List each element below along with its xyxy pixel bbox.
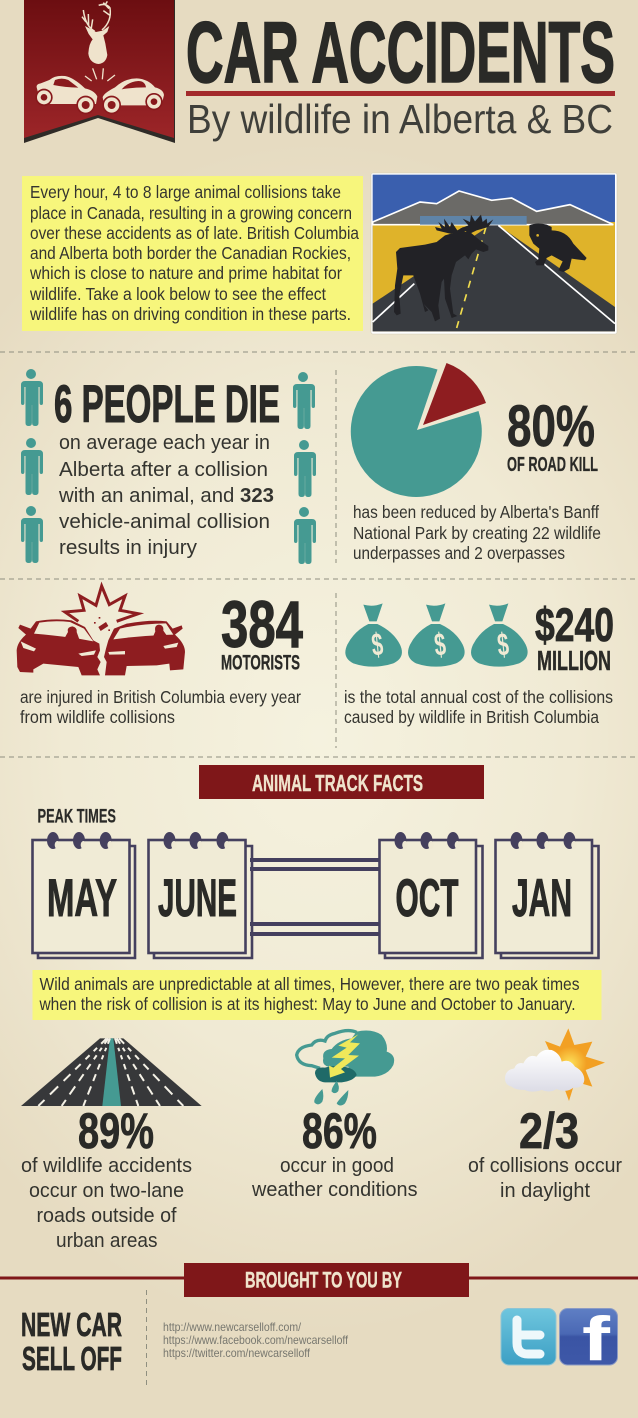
icon: crashed red cars [17, 586, 185, 675]
icon: money bags [345, 603, 528, 667]
icon: left car [35, 76, 97, 114]
icon: twitter [501, 1308, 556, 1365]
intro callout: over these accidents as of late. British Columbia [30, 223, 359, 243]
footer divider [146, 1290, 148, 1385]
intro callout [22, 176, 363, 331]
calendar: oct: OCT [396, 869, 458, 928]
intro callout: Every hour, 4 to 8 large animal collisions take [30, 182, 341, 202]
stat label: MOTORISTS [221, 652, 300, 674]
cost text [344, 687, 613, 727]
brand name [21, 1307, 122, 1378]
peak times callout: Wild animals are unpredictable at all times, However, there are two peak times [40, 974, 580, 994]
stat: 89%: 89% [78, 1103, 154, 1159]
icon: deer head [82, 1, 110, 64]
calendars [32, 832, 598, 958]
panel: motorists [17, 586, 303, 727]
roads text: occur on two-lane [29, 1179, 184, 1202]
intro callout: place in Canada, resulting in a growing concern [30, 203, 352, 223]
calendar: jan [496, 832, 598, 958]
section dividers [0, 352, 638, 757]
brand name: NEW CAR [21, 1307, 122, 1344]
heading: 6 people die: 6 PEOPLE DIE [54, 375, 280, 434]
icon: right car [102, 78, 164, 114]
stat: 80%: 80% [507, 394, 595, 459]
motorists text [20, 687, 301, 727]
panel: daylight [468, 1028, 622, 1202]
panel: good weather [251, 1031, 418, 1201]
roads text: roads outside of [36, 1204, 177, 1227]
motorists text: are injured in British Columbia every year [20, 687, 301, 707]
stat: 384: 384 [221, 587, 303, 661]
peak times callout: when the risk of collision is at its highest: May to June and October to January. [39, 994, 576, 1014]
daylight text [468, 1154, 622, 1202]
brand name: SELL OFF [22, 1341, 122, 1378]
deaths text: with an animal, and 323 [58, 484, 274, 507]
road kill text: National Park by creating 22 wildlife [353, 523, 601, 543]
footer links: https://www.facebook.com/newcarselloff [163, 1333, 349, 1347]
panel: road kill [351, 363, 601, 563]
panel: cost [344, 598, 614, 727]
road scene illustration [371, 173, 617, 334]
heading: animal track facts [199, 765, 484, 799]
icon: storm cloud [297, 1031, 394, 1105]
footer links: http://www.newcarselloff.com/ [163, 1320, 302, 1334]
road kill text: has been reduced by Alberta's Banff [353, 502, 599, 522]
roads text: of wildlife accidents [21, 1154, 192, 1177]
intro callout: wildlife has on driving condition in these parts. [29, 304, 351, 324]
intro callout: and Alberta both border the Canadian Rockies, [30, 243, 351, 263]
calendar: june: JUNE [158, 869, 237, 928]
intro callout: which is close to nature and prime habitat for [29, 263, 342, 283]
people icons [21, 369, 316, 564]
weather text: weather conditions [251, 1178, 418, 1201]
calendar: oct [380, 832, 482, 958]
motorists text: from wildlife collisions [20, 707, 175, 727]
intro callout: wildlife. Take a look below to see the effect [29, 284, 326, 304]
footer links: https://twitter.com/newcarselloff [163, 1346, 311, 1360]
panel: two-lane roads [21, 1038, 202, 1252]
heading: animal track facts: ANIMAL TRACK FACTS [252, 770, 423, 796]
connector bars [250, 860, 381, 934]
icon: facebook [560, 1305, 618, 1374]
deaths text: Alberta after a collision [59, 458, 268, 481]
banner emblem [24, 0, 175, 143]
cost text: is the total annual cost of the collisions [344, 687, 613, 707]
weather text [251, 1154, 418, 1201]
stat: 86%: 86% [302, 1103, 377, 1159]
calendar: june [148, 832, 252, 958]
daylight text: of collisions occur [468, 1154, 622, 1177]
cost text: caused by wildlife in British Columbia [344, 707, 599, 727]
daylight text: in daylight [500, 1179, 590, 1202]
peak times callout [32, 970, 602, 1020]
icon: bear [529, 223, 587, 272]
panel: people die [21, 369, 316, 564]
road kill text [353, 502, 601, 563]
deaths text: results in injury [59, 536, 198, 559]
pie chart [351, 363, 486, 497]
icon: crash rays [85, 68, 115, 81]
roads text [21, 1154, 192, 1252]
calendar: jan: JAN [512, 869, 572, 928]
stat: 2/3: 2/3 [519, 1103, 579, 1159]
deaths text [58, 431, 274, 559]
stat: $240: $240 [535, 598, 614, 651]
footer band: brought to you by [0, 1263, 638, 1297]
label: peak times: PEAK TIMES [38, 806, 116, 828]
deaths text: on average each year in [59, 431, 270, 454]
calendar: may [32, 832, 135, 958]
footer links [163, 1320, 349, 1360]
title rule [186, 91, 615, 96]
weather text: occur in good [280, 1154, 394, 1177]
icon: moose [394, 215, 493, 321]
icon: highway [21, 1038, 202, 1106]
deaths text: vehicle-animal collision [59, 510, 270, 533]
footer band: brought to you by: BROUGHT TO YOU BY [245, 1268, 402, 1292]
road kill text: underpasses and 2 overpasses [353, 543, 565, 563]
icon: sun and cloud [505, 1028, 605, 1101]
roads text: urban areas [56, 1229, 158, 1252]
calendar: may: MAY [47, 869, 117, 928]
icon: facebook: f [582, 1305, 610, 1374]
